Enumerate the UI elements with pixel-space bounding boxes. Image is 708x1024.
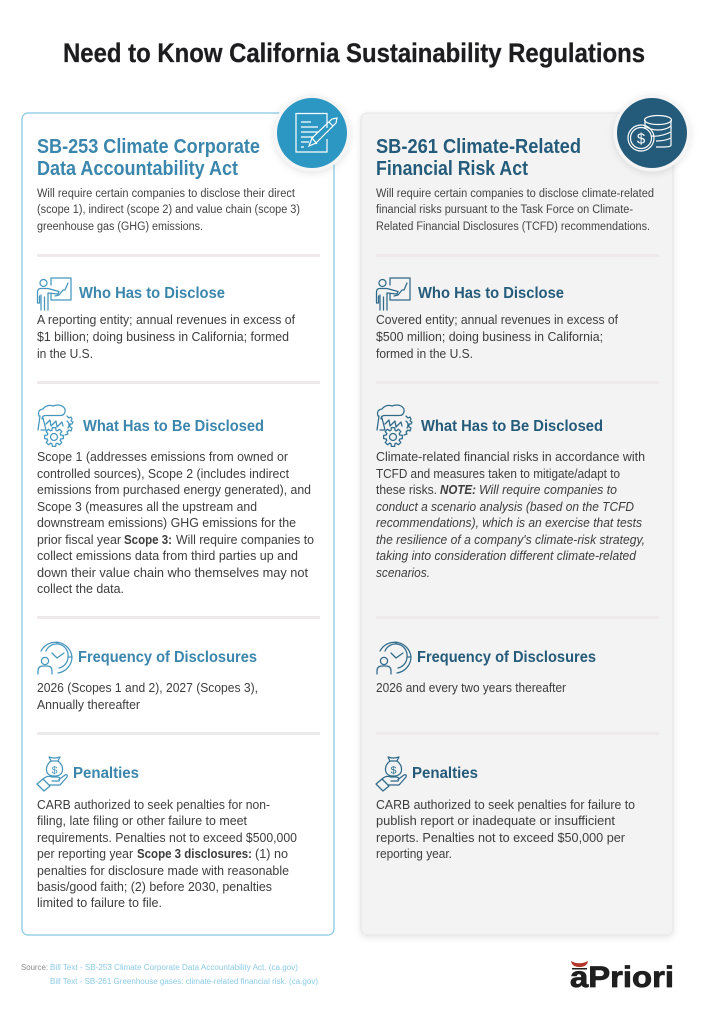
text: what has to be disclosed: scenarios. <box>376 566 430 580</box>
text: what has to be disclosed: TCFD and measures taken to mitigate/adapt to <box>376 467 620 481</box>
text: what has to be disclosed: Scope 1 (addresses emissions from owned or <box>37 450 288 464</box>
text: who has to disclose: $1 billion; doing business in California; formed <box>37 330 289 344</box>
heading: frequency: Frequency of Disclosures <box>417 649 596 666</box>
text: what has to be disclosed: these risks. <box>376 483 437 497</box>
text: what has to be disclosed: the resilience of a company's climate-risk strategy, <box>376 533 645 547</box>
heading: penalties: Penalties <box>73 765 139 782</box>
text: what has to be disclosed: prior fiscal year <box>37 533 121 547</box>
intro text: Related Financial Disclosures (TCFD) recommendations. <box>376 221 650 233</box>
text: penalties: basis/good faith; (2) before 2030, penalties <box>37 880 272 894</box>
text: what has to be disclosed: Will require companies to <box>479 483 617 497</box>
text: penalties: requirements. Penalties not to exceed $500,000 <box>37 831 297 845</box>
text: what has to be disclosed: emissions from purchased energy generated), and <box>37 483 311 497</box>
text: what has to be disclosed: Will require companies to <box>176 533 314 547</box>
source notes: Bill Text - SB-253 Climate Corporate Data Accountability Act. (ca.gov) <box>50 963 298 972</box>
heading: SB-253: SB-253 Climate Corporate <box>37 136 260 158</box>
text: penalties: Scope 3 disclosures: <box>137 847 252 861</box>
heading: SB-261: SB-261 Climate-Related <box>376 136 581 158</box>
icon: presenter <box>38 278 71 310</box>
panel: SB-253 <box>22 94 350 935</box>
text: who has to disclose: Covered entity; annual revenues in excess of <box>376 313 619 327</box>
text: who has to disclose: A reporting entity; annual revenues in excess of <box>37 313 296 327</box>
text: frequency: 2026 (Scopes 1 and 2), 2027 (Scopes 3), <box>37 681 258 695</box>
intro text: financial risks pursuant to the Task Force on Climate- <box>376 204 633 216</box>
icon: money bag in hand <box>376 757 406 791</box>
icon: coins <box>614 94 690 172</box>
text: what has to be disclosed: down their value chain who themselves may not <box>37 566 309 580</box>
heading: who has to disclose: Who Has to Disclose <box>79 285 225 302</box>
intro text: Will require certain companies to disclose climate-related <box>376 188 654 200</box>
icon: clock and person <box>38 642 72 674</box>
intro text: (scope 1), indirect (scope 2) and value chain (scope 3) <box>37 204 300 216</box>
source notes <box>21 963 318 986</box>
text: penalties: publish report or inadequate or insufficient <box>376 814 616 828</box>
text: what has to be disclosed: recommendations), which is an exercise that tests <box>376 516 642 530</box>
text: frequency: 2026 and every two years thereafter <box>376 681 566 695</box>
icon: money bag in hand <box>37 757 67 791</box>
heading: what has to be disclosed: What Has to Be Disclosed <box>421 418 603 435</box>
text: penalties: reports. Penalties not to exceed $50,000 per <box>376 831 625 845</box>
text: penalties: penalties for disclosure made with reasonable <box>37 864 289 878</box>
title: Need to Know California Sustainability Regulations <box>63 38 645 68</box>
panel: SB-261 <box>361 94 690 935</box>
icon: presenter <box>376 278 410 310</box>
text: frequency: Annually thereafter <box>37 698 140 712</box>
heading: what has to be disclosed: What Has to Be Disclosed <box>83 418 264 435</box>
text: who has to disclose: in the U.S. <box>37 347 93 361</box>
text: penalties: CARB authorized to seek penalties for non- <box>37 798 270 812</box>
heading: frequency: Frequency of Disclosures <box>78 649 257 666</box>
text: what has to be disclosed: Scope 3 (measures all the upstream and <box>37 500 257 514</box>
text: what has to be disclosed: NOTE: <box>440 483 476 497</box>
heading: SB-253: Data Accountability Act <box>37 158 238 180</box>
text: penalties: CARB authorized to seek penalties for failure to <box>376 798 635 812</box>
text: what has to be disclosed: downstream emissions) GHG emissions for the <box>37 516 296 530</box>
heading: who has to disclose: Who Has to Disclose <box>418 285 564 302</box>
icon: factory and gears <box>377 405 412 446</box>
text: what has to be disclosed: Climate-related financial risks in accordance with <box>376 450 645 464</box>
source notes: Source: <box>21 963 48 972</box>
text: what has to be disclosed: taking into consideration different climate-related <box>376 549 637 563</box>
text: who has to disclose: formed in the U.S. <box>376 347 473 361</box>
text: penalties: reporting year. <box>376 847 452 861</box>
heading: SB-261: Financial Risk Act <box>376 158 528 180</box>
heading: penalties: Penalties <box>412 765 478 782</box>
icon: clock and person <box>377 642 411 674</box>
text: what has to be disclosed: collect the data. <box>37 582 124 596</box>
icon: coins: $ <box>637 130 646 148</box>
text: penalties: (1) no <box>255 847 288 861</box>
text: penalties: limited to failure to file. <box>37 896 162 910</box>
text: what has to be disclosed: controlled sources), Scope 2 (includes indirect <box>37 467 290 481</box>
icon: factory and gears <box>38 405 73 446</box>
text: penalties: filing, late filing or other failure to meet <box>37 814 248 828</box>
text: penalties: per reporting year <box>37 847 133 861</box>
text: what has to be disclosed: collect emissions data from third parties up and <box>37 549 298 563</box>
text: what has to be disclosed: conduct a scenario analysis (based on the TCFD <box>376 500 634 514</box>
logo: aPriori: aPriori <box>570 961 674 994</box>
text: who has to disclose: $500 million; doing business in California; <box>376 330 603 344</box>
source notes: Bill Text - SB-261 Greenhouse gases: climate-related financial risk. (ca.gov) <box>50 977 318 986</box>
text: what has to be disclosed: Scope 3: <box>124 533 172 547</box>
intro text: Will require certain companies to disclose their direct <box>37 188 296 200</box>
intro text: greenhouse gas (GHG) emissions. <box>37 221 203 233</box>
icon: document and pen <box>274 94 350 172</box>
